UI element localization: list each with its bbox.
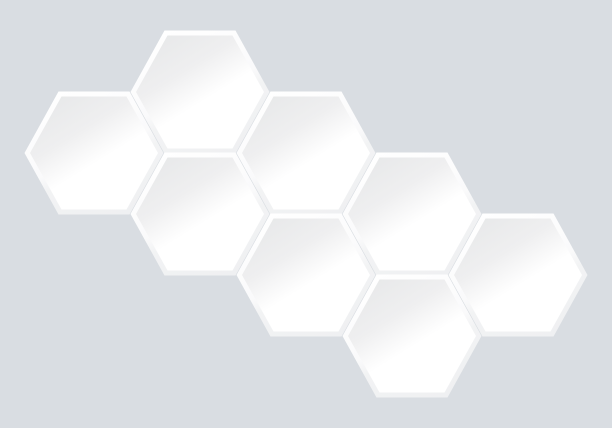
hexagon 6	[342, 152, 482, 276]
hexagon 4	[130, 152, 270, 276]
hexagon 5	[236, 214, 376, 336]
hexagon 7	[448, 214, 588, 336]
hexagon 8	[342, 274, 482, 398]
hexagon 2	[130, 30, 270, 154]
hexagon 1	[24, 92, 164, 214]
hexagon 3	[236, 92, 376, 214]
